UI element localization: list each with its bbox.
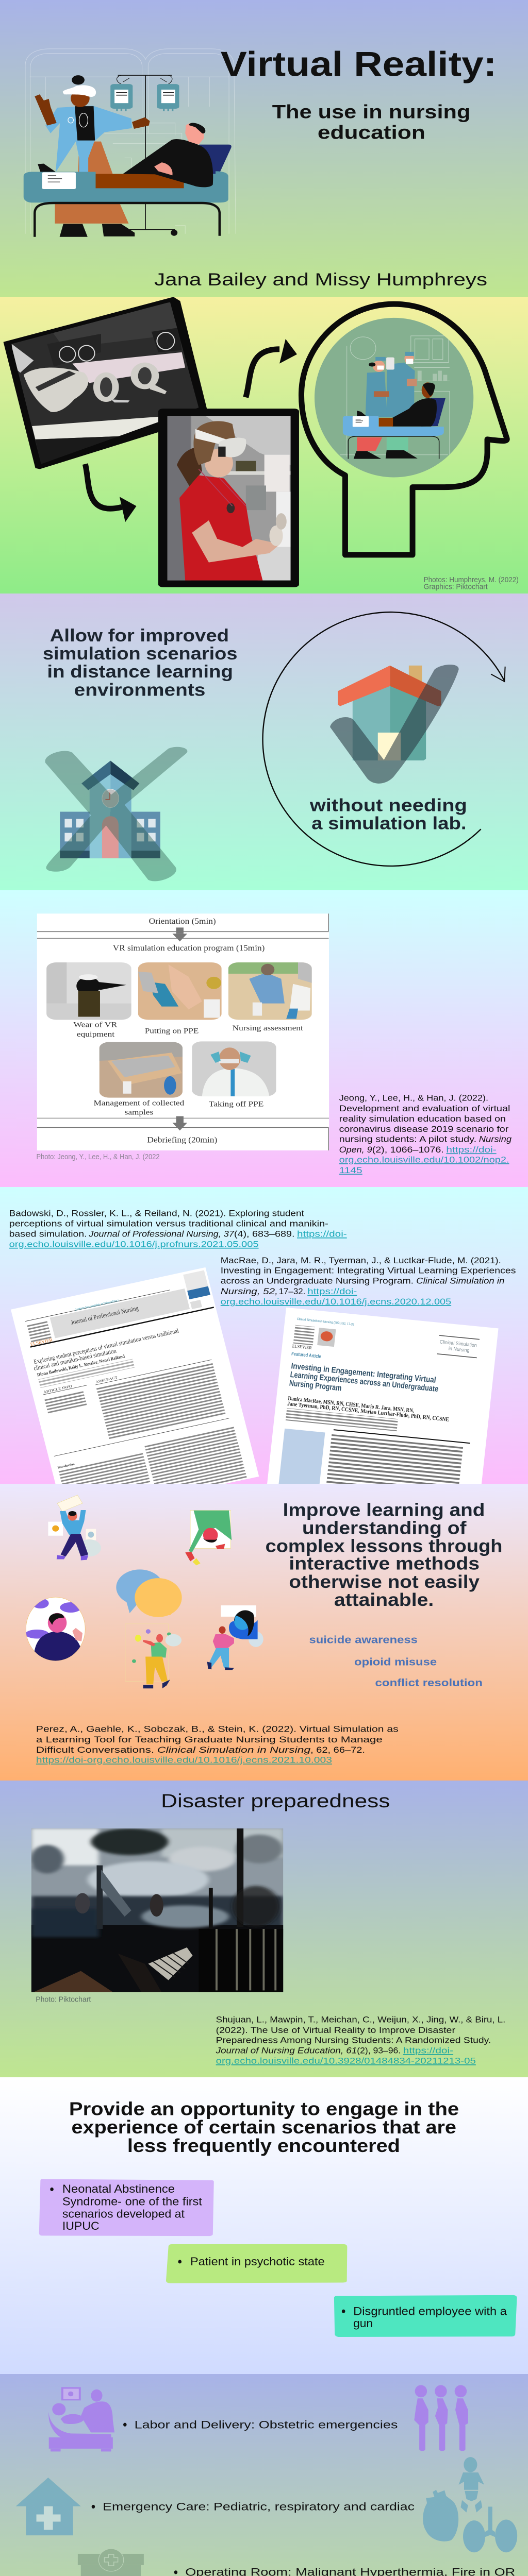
citation: MacRae: https://doi-	[307, 1286, 357, 1296]
photo: management of collected samples	[100, 1042, 183, 1098]
article page: Clinical Simulation in Nursing: ELSEVIER	[292, 1343, 312, 1350]
article page: Clinical Simulation in Nursing: Clinical Simulation in Nursing (2021) 52, 17-32	[296, 1317, 354, 1326]
figure: VR simulation education program flow: VR simulation education program (15min)	[113, 943, 265, 953]
article page: Clinical Simulation in Nursing: Featured Article	[291, 1351, 321, 1359]
figure: VR simulation education program flow: Putting on PPE	[145, 1027, 199, 1035]
illustration: nurse with VR headset and patient in bed	[24, 49, 236, 237]
figure: VR simulation education program flow: Nursing assessment	[233, 1024, 303, 1032]
citation: MacRae: 17–32.	[279, 1286, 305, 1296]
panel: title section	[0, 0, 528, 297]
citation: Shujuan: Journal of Nursing Education, 61	[216, 2045, 357, 2055]
citation: Perez: Perez, A., Gaehle, K., Sobczak, B., & Stein, K. (2022). Virtual Simulation as	[36, 1724, 399, 1734]
citation: Shujuan	[216, 2014, 505, 2065]
note: neonatal abstinence syndrome: Syndrome- one of the first	[62, 2195, 202, 2208]
article page: Journal of Professional Nursing: Diona Badowski, Kelly L. Rossler, Nanci Reiland	[37, 1353, 125, 1378]
figure: VR simulation education program flow: Management of collected	[94, 1099, 185, 1107]
photo: VR headset and controllers on desk	[0, 297, 209, 469]
photo: taking off PPE	[192, 1041, 276, 1096]
icon: baby, heart and lungs	[423, 2457, 517, 2552]
panel: distance learning	[0, 594, 528, 890]
list: example topics: conflict resolution	[375, 1677, 483, 1689]
article page: Journal of Professional Nursing: ABSTRACT	[95, 1376, 118, 1384]
note: patient in psychotic state: Patient in psychotic state	[190, 2256, 325, 2268]
photo: putting on PPE	[138, 962, 222, 1020]
photo: student in red scrubs wearing VR headset	[158, 409, 299, 587]
panel: less frequently encountered scenarios	[0, 2077, 528, 2374]
icon: operating room doors	[78, 2549, 144, 2576]
subtitle: education	[318, 122, 425, 143]
note: patient in psychotic state	[166, 2244, 347, 2283]
list: example topics	[309, 1634, 483, 1689]
icon: head outline with imagined operating room scene	[301, 304, 507, 555]
citation: Badowski: based simulation.	[9, 1229, 87, 1239]
list: example topics: suicide awareness	[309, 1634, 418, 1646]
citation: Badowski: org.echo.louisville.edu/10.1016/j.profnurs.2021.05.005	[9, 1239, 259, 1249]
article page: Clinical Simulation in Nursing: Danica MacRae, MSN, RN, CHSE, Mario R. Jara, MSN, RN,	[288, 1395, 415, 1414]
text: emergency care: Emergency Care: Pediatric, respiratory and cardiac	[103, 2501, 415, 2513]
citation: MacRae: across an Undergraduate Nursing Program.	[221, 1276, 414, 1285]
note: neonatal abstinence syndrome: Neonatal Abstinence	[62, 2183, 175, 2195]
citation: MacRae: Nursing, 52,	[221, 1286, 278, 1296]
panel: clinical emergencies list	[0, 2374, 528, 2576]
figure: VR simulation education program flow: Orientation (5min)	[149, 917, 216, 926]
citation: Jeong	[339, 1093, 512, 1175]
article page: Journal of Professional Nursing: ARTICLE INFO	[43, 1384, 73, 1394]
list: example topics: opioid misuse	[354, 1656, 437, 1668]
heading: disaster preparedness: Disaster preparedness	[161, 1790, 390, 1811]
note: disgruntled employee	[334, 2295, 517, 2337]
figure: VR simulation education program flow: samples	[125, 1108, 153, 1116]
citation: Perez: Clinical Simulation in Nursing	[157, 1744, 311, 1754]
icon: home with check mark	[330, 665, 459, 784]
citation: Badowski: https://doi-	[297, 1229, 347, 1239]
icon: ultrasound examination	[48, 2387, 114, 2451]
icon: school building crossed out	[45, 747, 187, 881]
text: labor and delivery: Labor and Delivery: Obstetric emergencies	[135, 2419, 398, 2431]
heading: allow for improved simulation: in distance learning	[47, 662, 233, 681]
subtitle	[272, 101, 470, 143]
curved arrow circling the home	[263, 612, 505, 866]
heading: provide an opportunity: less frequently encountered	[127, 2136, 400, 2156]
figure: VR simulation education program flow: Debriefing (20min)	[147, 1135, 217, 1144]
panel: journal articles	[0, 1187, 528, 1530]
citation: Jeong: nursing students: A pilot study.	[339, 1134, 476, 1144]
article page: Journal of Professional Nursing: Contents lists available at ScienceDirect	[74, 1299, 119, 1312]
photo: wearing VR equipment	[46, 962, 131, 1020]
citation: Perez: Difficult Conversations.	[36, 1744, 154, 1754]
citation: Jeong: (2), 1066–1076.	[372, 1145, 444, 1155]
citation: Perez: , 62, 66–72.	[310, 1744, 365, 1754]
article page: Clinical Simulation in Nursing	[265, 1308, 499, 1530]
citation: Perez: a Learning Tool for Teaching Graduate Nursing Students to Manage	[36, 1734, 383, 1744]
figure: speech bubbles	[116, 1569, 182, 1617]
article page: Journal of Professional Nursing: ELSEVIER	[30, 1337, 53, 1347]
citation: Badowski: perceptions of virtual simulation versus traditional clinical and manikin-	[9, 1218, 328, 1228]
article page: Clinical Simulation in Nursing: in Nursing	[448, 1346, 470, 1353]
citation: Shujuan: https://doi-	[403, 2045, 453, 2055]
figure: woman in window with man waving	[207, 1605, 263, 1670]
citation: Shujuan: (2), 93–96.	[357, 2045, 401, 2055]
photo: firefighters in smoke after a disaster	[30, 1828, 283, 1992]
citation: Jeong: Nursing	[479, 1134, 512, 1144]
arrow: up to head	[246, 339, 297, 397]
heading: allow for improved simulation: environments	[74, 680, 205, 700]
heading: provide an opportunity	[69, 2099, 459, 2156]
article page: Journal of Professional Nursing: Journal of Professional Nursing	[70, 1304, 139, 1326]
citation: Perez	[36, 1724, 399, 1765]
note: disgruntled employee: gun	[353, 2317, 373, 2330]
heading: improve learning and understanding: attainable.	[334, 1590, 434, 1610]
figure: man in circular portrait	[25, 1597, 85, 1660]
citation: Jeong: 1145	[339, 1165, 362, 1175]
panel: disaster preparedness	[0, 1781, 528, 2077]
photo: nursing assessment	[228, 962, 312, 1020]
heading: improve learning and understanding	[266, 1500, 502, 1610]
citation: Badowski: (4), 683–689.	[234, 1229, 294, 1239]
figure: VR simulation education program flow: Taking off PPE	[209, 1100, 263, 1108]
article page: Journal of Professional Nursing	[11, 1267, 259, 1519]
heading: allow for improved simulation: Allow for improved	[50, 625, 229, 645]
figure: person holding sign	[48, 1495, 101, 1560]
citation: Badowski: Journal of Professional Nursing, 37	[89, 1229, 235, 1239]
panel: VR headset to student to mental scene	[0, 297, 528, 594]
panel: improve learning with interactive methods	[0, 1484, 528, 1781]
note: neonatal abstinence syndrome: IUPUC	[62, 2220, 100, 2232]
article page: Journal of Professional Nursing: Exploring student perceptions of virtual simulation versus traditional	[33, 1327, 179, 1365]
panel: VR simulation education figure	[0, 890, 528, 1187]
citation: Badowski: Badowski, D., Rossler, K. L., & Reiland, N. (2021). Exploring student	[9, 1208, 304, 1218]
citation: Badowski	[9, 1208, 347, 1249]
citation: Perez: https://doi-org.echo.louisville.edu/10.1016/j.ecns.2021.10.003	[36, 1755, 332, 1765]
note: neonatal abstinence syndrome: scenarios developed at	[62, 2208, 185, 2220]
figure: person upside down in frame	[185, 1511, 232, 1565]
article page: Journal of Professional Nursing: Introduction	[57, 1462, 75, 1469]
figure: VR simulation education program flow: Wear of VR	[73, 1021, 118, 1029]
text: without needing a simulation lab: without needing	[309, 795, 467, 815]
figure: person pointing at floating shapes	[125, 1624, 182, 1688]
icon: pregnancy stages	[414, 2385, 468, 2451]
icon: hospital house	[16, 2478, 81, 2535]
text: without needing a simulation lab	[309, 795, 467, 833]
article page: Clinical Simulation in Nursing: Clinical Simulation	[439, 1339, 477, 1348]
photo credit: Photo: Piktochart	[36, 1995, 91, 2004]
article page: Clinical Simulation in Nursing: Nursing Program	[289, 1378, 342, 1393]
arrow: down to student	[85, 464, 137, 522]
photo credits	[424, 576, 519, 591]
citation: Jeong: Open, 9	[339, 1145, 372, 1155]
citation: Jeong: https://doi-	[446, 1145, 497, 1155]
article page: Journal of Professional Nursing: clinical and manikin-based simulation	[33, 1347, 118, 1372]
citation: MacRae	[221, 1255, 516, 1306]
figure: VR simulation education program flow	[37, 913, 329, 1150]
heading: allow for improved simulation	[43, 625, 237, 700]
figure: VR simulation education program flow: equipment	[77, 1030, 114, 1039]
note: neonatal abstinence syndrome	[39, 2179, 214, 2236]
heading: allow for improved simulation: simulation scenarios	[43, 643, 237, 663]
photo credit: Photo: Jeong, Y., Lee, H., & Han, J. (2022	[37, 1153, 160, 1161]
